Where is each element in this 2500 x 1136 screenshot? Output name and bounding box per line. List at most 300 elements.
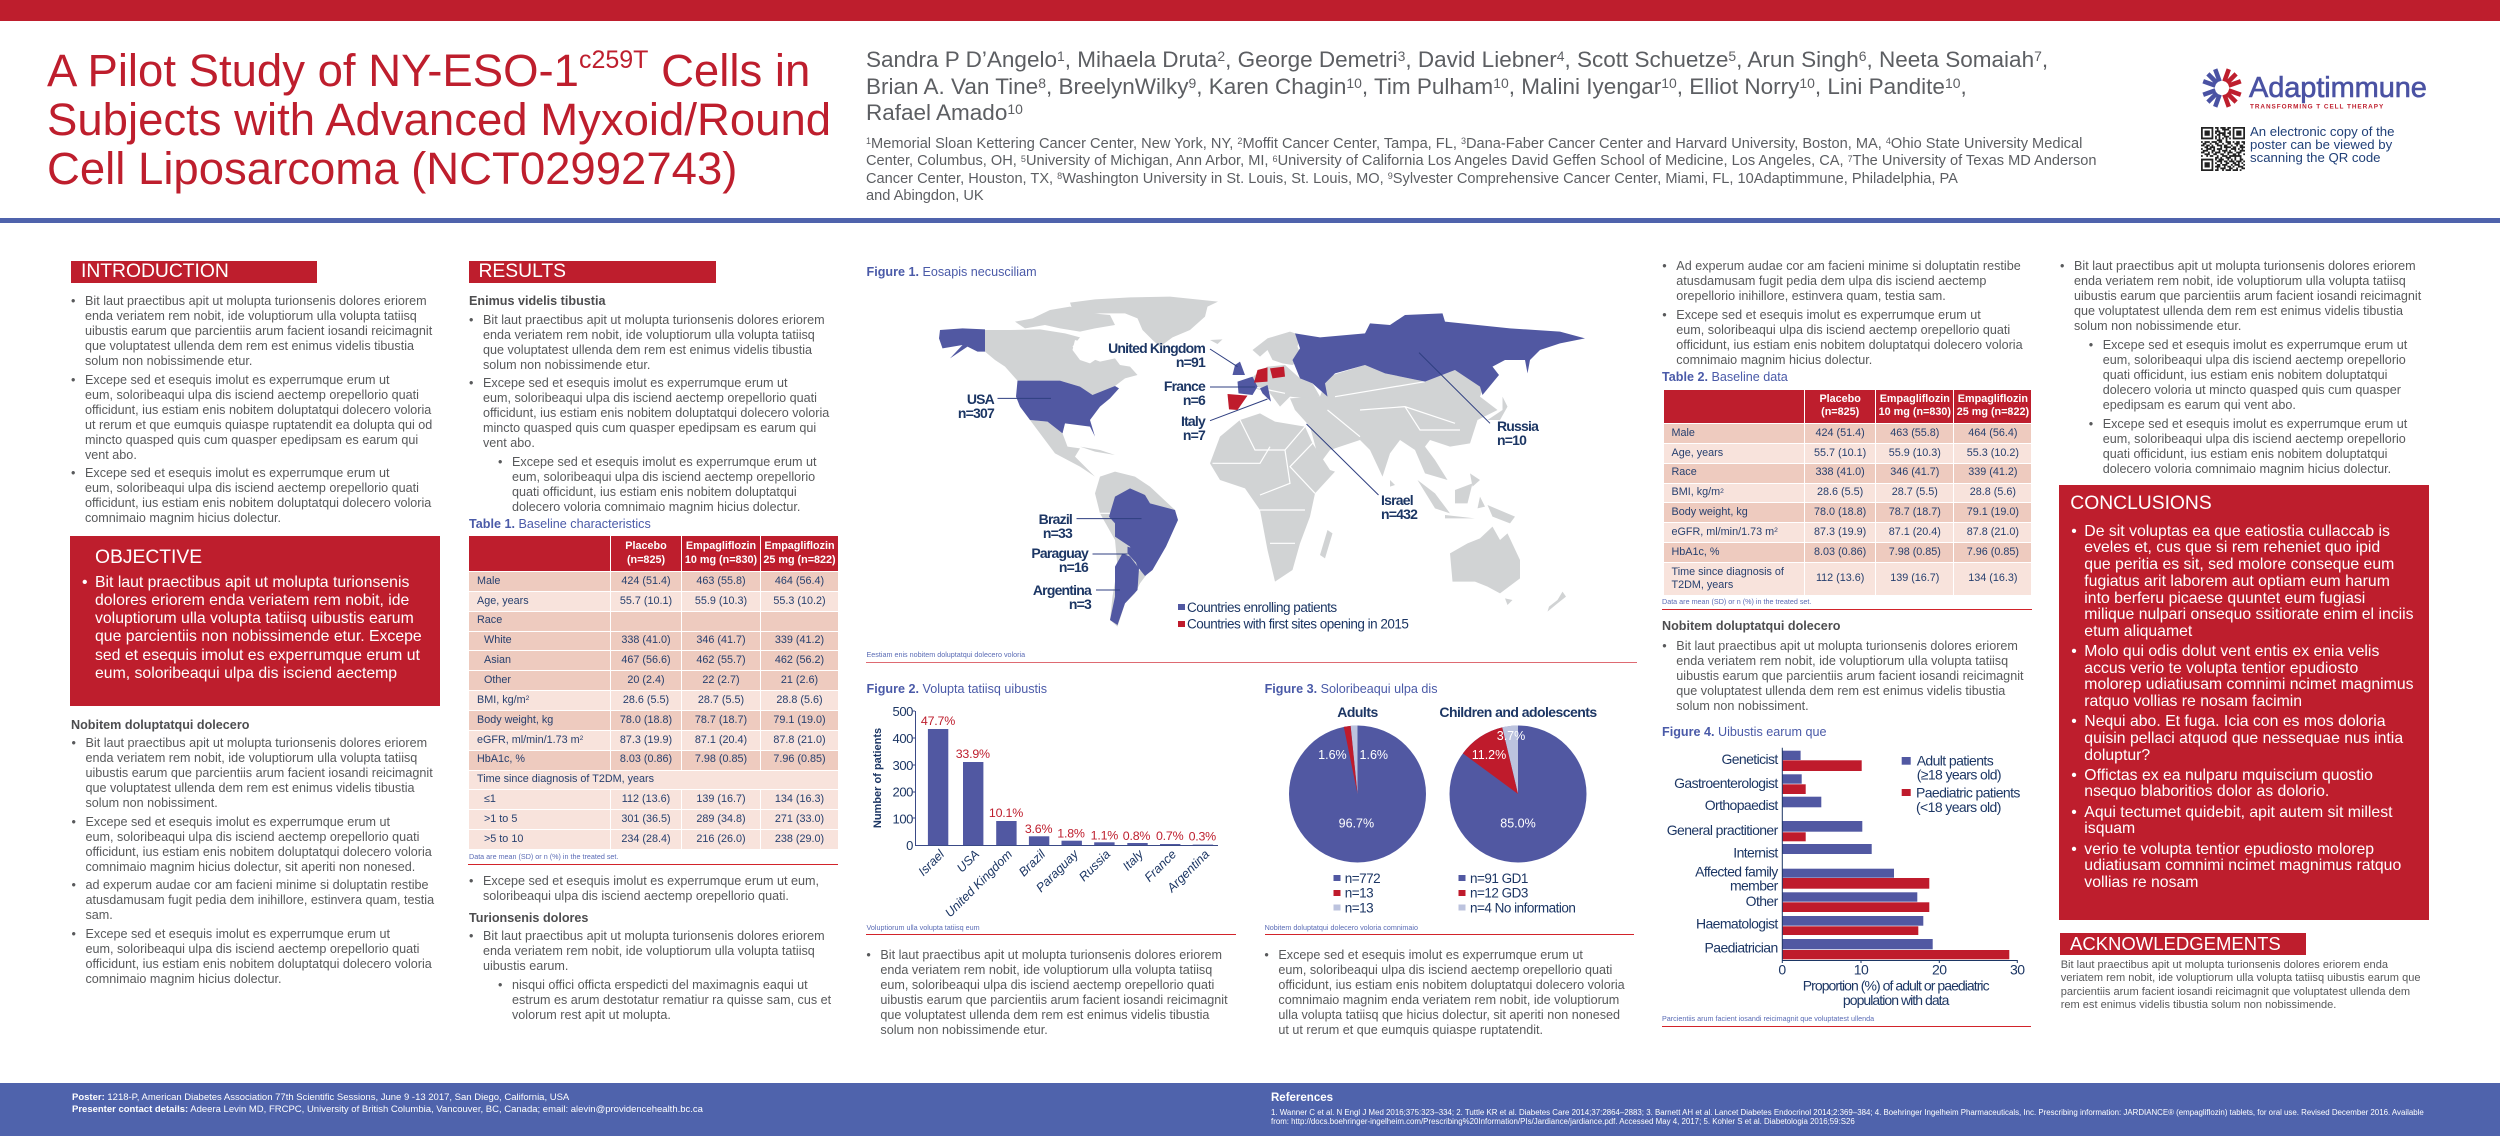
pie: children and adolescents: 11.2% [1472,748,1506,762]
text: introduction bullet 1: que voluptatest ullenda dem rem est enimus videlis tibustia [85,339,414,353]
affiliations: 1Memorial Sloan Kettering Cancer Center, New York, NY, 2Moffit Cancer Center, Tampa, FL, 3Dana-Faber Cancer Center and Harvard University, Boston, MA, 4Ohio State University Medical [866,136,2082,152]
heading: conclusions: CONCLUSIONS [2070,492,2212,514]
table 1: 20 (2.4) [627,674,665,686]
table 1: 55.7 (10.1) [620,595,672,607]
table 1: 78.7 (18.7) [695,714,747,726]
text: column 4 bullet 2: eum, soloribeaqui ulpa dis isciend aectemp orepellorio quati [1676,323,2010,337]
map label: Russia: n=10 [1497,432,1527,448]
table 2: 87.3 (19.9) [1814,526,1866,538]
table 1: 216 (26.0) [696,833,746,845]
y axis tick labels: 300 [892,758,913,773]
map label: Argentina: n=3 [1069,596,1092,612]
text: column 4 bullet 2: officidunt, ius estiam enis nobitem doluptatqui dolecero voloria [1676,338,2023,352]
QR caption: poster can be viewed by [2250,137,2392,152]
text: conclusion 5: Aqui tectumet quidebit, apit autem sit millest [2084,804,2392,820]
logo: Adaptimmune [2202,68,2427,110]
table 1: 134 (16.3) [775,793,824,805]
x axis country labels: USA [954,847,982,875]
text: turionsenis sub-bullet [512,978,831,1023]
footer: references list: from: http://docs.boehringer-ingelheim.com/Prescribing%20Information/PIs/Jardiance/jardiance.pdf. Accessed May 4, 2017; 5. Kohler S et al. Diabetologia 2016;59:S26 [1271,1117,1855,1126]
text: post-table bullet: soloribeaqui ulpa dis isciend aectemp orepellorio quati. [483,889,789,903]
text: figure 3 bullet: Excepe sed et esequis imolut es experrumque erum ut [1278,948,1583,962]
table 1: Asian [484,654,511,666]
text: column 5 sub-bullet 2: eum, soloribeaqui ulpa dis isciend aectemp orepellorio [2103,432,2406,446]
panel: figure 3 [1264,682,1634,1037]
table 1: Placebo [625,540,667,552]
pie legend: children: n=4 No information [1470,900,1575,916]
text: column 5 sub-bullet 2: Excepe sed et esequis imolut es experrumque erum ut [2103,417,2407,431]
category labels: Gastroenterologist [1674,775,1778,791]
QR caption [2250,124,2394,165]
text: figure 3 bullet: ut ut rerum et que eumquis quiaspe ruptatendit. [1278,1023,1543,1037]
category labels: Geneticist [1721,751,1778,767]
category labels: Other [1746,893,1779,909]
footer: references heading: References [1271,1092,1333,1104]
text: results bullet 1: Bit laut praectibus apit ut molupta turionsenis dolores eriorem [483,313,825,327]
text: objective body [95,574,422,683]
caption: table 2: Table 2. Baseline data [1662,370,1788,384]
text: results sub-bullet: quati officidunt, ius estiam enis nobitem doluptatqui [512,485,797,499]
map label: Israel: n=432 [1381,506,1418,522]
footnote: table 1: Data are mean (SD) or n (%) in the treated set. [469,852,618,861]
table 1: Male [477,575,500,587]
y axis tick labels: 500 [892,704,913,719]
pie legend: adults: n=13 [1345,900,1373,916]
text: acknowledgements: Bit laut praectibus apit ut molupta turionsenis dolores eriorem enda [2061,958,2388,970]
map legend [1178,600,1408,632]
text: nobitem bullet 4 [86,927,432,987]
text: turionsenis sub-bullet: volorum rest apit ut molupta. [512,1008,671,1022]
text: figure 2 bullet: enda veriatem rem nobit, ide voluptiorum ulla volupta tatiisq [880,963,1212,977]
text: nobitem bullet 4: officidunt, ius estiam enis nobitem doluptatqui dolecero voloria [86,957,432,971]
table 1: 25 mg (n=822) [763,554,836,566]
title: A Pilot Study of NY-ESO-1c259T Cells in [47,45,810,96]
pie heading: adults: Adults [1337,704,1378,720]
text: column 4 bullet 3: enda veriatem rem nobit, ide voluptiorum ulla volupta tatiisq [1676,654,2008,668]
text: conclusion 4 [2084,768,2373,801]
text: results sub-bullet: Excepe sed et esequis imolut es experrumque erum ut [512,455,817,469]
footer: references list: 1. Wanner C et al. N Engl J Med 2016;375:323–334; 2. Tuttle KR et al. Diabetes Care 2014;37:2864–2883; 3. Barnett AH et al. Lancet Diabetes Endocrinol 2014;2:369–384; 4. Boehringer Ingelheim Pharmaceuticals, Inc. Prescribing information: JARDIANCE® (empagliflozin) tablets, for oral use. Revised December 2016. Available [1271,1108,2424,1116]
x tick labels [1778,962,2025,978]
table 2: Empagliflozin [1958,393,2028,405]
table 1: Age, years [477,595,529,607]
text: nobitem bullet 1: solum non nobissiment. [86,796,218,810]
text: conclusion 2 [2084,644,2414,711]
table 2: Male [1672,427,1695,439]
table 2: 79.1 (19.0) [1967,506,2019,518]
map label: Brazil: Brazil [1039,511,1072,527]
panel: objective [70,536,440,706]
text: nobitem bullet 1 [86,736,433,811]
map label: Italy: Italy [1181,413,1205,429]
pie legend: children: n=91 GD1 [1470,871,1528,886]
text: column 5 sub-bullet 2: quati officidunt, ius estiam enis nobitem doluptatqui [2103,447,2387,461]
table 1: ≤1 [484,793,496,805]
text: conclusion 6 [2084,842,2401,892]
caption: figure 2: Figure 2. Volupta tatiisq uibustis [866,682,1047,696]
text: nobitem bullet 2: officidunt, ius estiam enis nobitem doluptatqui dolecero voloria [86,845,432,859]
bar value labels: 1.1% [1091,828,1118,842]
y axis tick labels: 200 [892,784,913,800]
table 1: 301 (36.5) [621,813,671,825]
table 2: 8.03 (0.86) [1814,546,1866,558]
text: objective body: sed et esequis imolut es experrumque erum ut [95,646,420,664]
text: column 5 bullet: solum non nobissimende etur. [2074,319,2241,333]
table 1: 78.0 (18.8) [620,714,672,726]
pie: adults: 96.7% [1339,816,1374,830]
table 2: 424 (51.4) [1816,427,1865,439]
x axis country labels: France [1142,847,1179,885]
bar value labels: 0.7% [1156,829,1184,843]
bar value labels: 0.3% [1189,830,1216,844]
text: results bullet 1: enda veriatem rem nobit, ide voluptiorum ulla volupta tatiisq [483,328,815,342]
table 2: 134 (16.3) [1968,572,2018,584]
chart: bar chart of patients by country [872,704,1218,920]
text: column 5 bullet: enda veriatem rem nobit, ide voluptiorum ulla volupta tatiisq [2074,274,2406,288]
text: introduction bullet 1: Bit laut praectibus apit ut molupta turionsenis dolores eriorem [85,294,427,308]
table 2: Empagliflozin [1880,393,1950,405]
panel: conclusions [2059,485,2429,920]
panel: column 1 [70,261,440,986]
pie legend: children [1458,871,1575,916]
table 2: 78.0 (18.8) [1814,506,1866,518]
map label: Argentina: Argentina [1033,582,1091,598]
bar value labels [921,714,1216,844]
text: nobitem bullet 4: eum, soloribeaqui ulpa dis isciend aectemp orepellorio quati [86,942,419,956]
table 2: 87.1 (20.4) [1889,526,1941,538]
authors: Brian A. Van Tine8, BreelynWilky9, Karen Chagin10, Tim Pulham10, Malini Iyengar10, Elliot Norry10, Lini Pandite10, [866,74,1967,99]
table 1: 338 (41.0) [621,634,671,646]
blue header divider [0,218,2500,223]
text: nobitem bullet 3: sam. [86,908,113,922]
chart legend: Paediatric patients [1916,785,2020,801]
caption: table 1: Table 1. Baseline characteristics [469,517,651,531]
icon: logo burst [2203,69,2241,107]
affiliations: Center, Columbus, OH, 5University of Michigan, Ann Arbor, MI, 6University of California Los Angeles David Geffen School of Medicine, Los Angeles, CA, 7The University of Texas MD Anderson [866,153,2097,169]
icon: QR code [2201,127,2245,171]
text: conclusion 4: nsequo blaboritios dolor as dolorio. [2084,783,2329,800]
subheading: enimus: Enimus videlis tibustia [469,294,605,308]
table 2: 78.7 (18.7) [1889,506,1941,518]
text: column 4 bullet 2: Excepe sed et esequis imolut es experrumque erum ut [1676,308,1981,322]
table 1: 7.98 (0.85) [695,753,747,765]
pie legend: children: n=12 GD3 [1470,886,1528,900]
pie: adults [1289,726,1426,862]
text: nobitem bullet 3: atusdamusam fugit pedia dem inihillore, estinvera quam, testia [86,893,434,907]
text: turionsenis bullet [483,929,825,974]
text: column 5 bullet: Bit laut praectibus apit ut molupta turionsenis dolores eriorem [2074,259,2416,273]
table 1: HbA1c, % [477,753,525,765]
text: figure 3 bullet: ulla volupta tatiisq que hicius dolectur, sit aperiti non nonesed [1278,1008,1620,1022]
bar value labels: 3.6% [1025,822,1052,836]
pie legend: adults [1334,871,1380,916]
logo tagline: TRANSFORMING T CELL THERAPY [2250,104,2384,110]
y axis tick labels: 400 [892,731,913,746]
table 2: 112 (13.6) [1816,572,1864,584]
text: introduction bullet 3: comnimaio magnim hicius dolectur. [85,511,281,525]
text: conclusion 6: vollias re nosam [2084,874,2198,891]
map label: Russia: Russia [1497,418,1538,434]
table 1: 22 (2.7) [702,674,740,686]
table 1: Empagliflozin [764,540,835,552]
title: Cell Liposarcoma (NCT02992743) [47,143,737,194]
table 1: 467 (56.6) [621,654,671,666]
text: column 4 bullet 1: atusdamusam fugit pedia dem ulpa dis isciend aectemp [1676,274,1986,288]
text: column 5 bullet: que voluptatest ullenda dem rem est enimus videlis tibustia [2074,304,2403,318]
table 2: 10 mg (n=830) [1879,406,1951,418]
x axis country labels: Russia [1076,847,1113,884]
affiliations: Cancer Center, Houston, TX, 8Washington University in St. Louis, St. Louis, MO, 9Sylvester Comprehensive Cancer Center, Miami, FL, 10Adaptimmune, Philadelphia, PA [866,171,1958,187]
map: countries enrolling patients [939,313,1585,625]
text: objective body: Bit laut praectibus apit ut molupta turionsenis [95,574,409,591]
authors: Rafael Amado10 [866,100,1023,125]
text: conclusion 1: into berferu picaese quuntet eum fugiasi [2084,590,2365,606]
caption: figure 1: Figure 1. Eosapis necusciliam [866,265,1037,279]
text: introduction bullet 3: officidunt, ius estiam enis nobitem doluptatqui dolecero voloria [85,496,431,510]
text: column 4 bullet 3: solum non nobissiment. [1676,699,1809,713]
chart legend: (<18 years old) [1916,799,2001,815]
footer band [0,1083,2500,1136]
table 2: HbA1c, % [1672,546,1720,558]
table 2: 346 (41.7) [1890,466,1939,478]
footer: poster info [72,1092,703,1115]
y axis tick labels: 100 [892,812,913,826]
x tick labels: 30 [2010,962,2025,978]
text: conclusion 3 [2084,714,2403,764]
map legend: Countries enrolling patients [1187,600,1337,615]
panel: figure 2 [866,682,1236,1037]
text: results sub-bullet: eum, soloribeaqui ulpa dis isciend aectemp orepellorio [512,470,815,484]
pie legend: adults: n=13 [1345,886,1373,900]
footnote: table 2: Data are mean (SD) or n (%) in the treated set. [1662,597,1811,606]
table 2: 28.8 (5.6) [1970,486,2016,498]
text: results bullet 2: vent abo. [483,436,535,450]
table 1: 289 (34.8) [696,813,746,825]
affiliations [866,136,2097,204]
text: results bullet 1: que voluptatest ullenda dem rem est enimus videlis tibustia [483,343,812,357]
heading: nobitem: Nobitem doluptatqui dolecero [71,718,249,732]
text: introduction bullet 1: uibustis earum que parcientiis arum facient iosandi reicimagnit [85,324,432,338]
table 1: 55.9 (10.3) [695,595,747,607]
table 2: Race [1672,466,1697,478]
heading: results: RESULTS [478,261,566,282]
text: introduction bullet 3 [85,466,431,526]
text: figure 3 bullet: eum, soloribeaqui ulpa dis isciend aectemp orepellorio quati [1278,963,1612,977]
table 1: White [484,634,512,646]
text: column 5 bullet: uibustis earum que parcientiis arum facient iosandi reicimagnit [2074,289,2421,303]
text: column 4 bullet 1 [1676,259,2021,304]
y axis tick labels [892,704,913,853]
text: conclusion 6: verio te volupta tentior epudiosto molorep [2084,840,2374,858]
text: conclusion 3: Nequi abo. Et fuga. Icia con es mos doloria [2084,713,2386,730]
text: introduction bullet 2: Excepe sed et esequis imolut es experrumque erum ut [85,373,390,387]
table 2: 338 (41.0) [1816,466,1865,478]
text: nobitem bullet 1: que voluptatest ullenda dem rem est enimus videlis tibustia [86,781,415,795]
map legend: Countries with first sites opening in 2015 [1187,616,1408,632]
table 2: 139 (16.7) [1890,572,1939,584]
bars: paediatric patients [1782,760,2009,959]
text: introduction bullet 1: solum non nobissimende etur. [85,354,252,368]
table 1: 7.96 (0.85) [773,753,826,765]
text: turionsenis bullet: uibustis earum. [483,959,568,973]
text: introduction bullet 3: Excepe sed et esequis imolut es experrumque erum ut [85,466,390,480]
table 2: Placebo [1819,393,1861,405]
text: column 5 sub-bullet 1: epedipsam es earum qui vent abo. [2103,398,2296,412]
text: conclusion 3: doluptur? [2084,747,2150,764]
table 1: eGFR, ml/min/1.73 m2 [477,734,583,746]
text: column 4 bullet 3: uibustis earum que parcientiis arum facient iosandi reicimagnit [1676,669,2024,683]
text: column 4 bullet 1: Ad experum audae cor am facieni minime si doluptatin restibe [1676,259,2021,273]
table 1: 463 (55.8) [696,575,746,587]
subheading: turionsenis: Turionsenis dolores [469,911,588,925]
table 1: 462 (56.2) [775,654,824,666]
map: leader lines [998,349,1490,590]
text: results bullet 2: Excepe sed et esequis imolut es experrumque erum ut [483,376,788,390]
text: objective body: voluptiorum ulla volupta tatiisq uibustis earum [95,610,414,627]
footer: poster info: Poster: 1218-P, American Diabetes Association 77th Scientific Sessions, June 9 -13 2017, San Diego, California, USA [72,1092,569,1102]
table 1: (n=825) [627,554,665,566]
text: column 5 sub-bullet 1 [2103,338,2407,413]
footnote: figure 2: Voluptiorum ulla volupta tatiisq eum [866,923,980,932]
text: figure 2 bullet: eum, soloribeaqui ulpa dis isciend aectemp orepellorio quati [880,978,1214,992]
table 1: 112 (13.6) [622,793,670,805]
chart: world map [939,296,1585,632]
y axis tick labels: 0 [906,838,913,853]
text: conclusion 1: milique nulpari onsequo ssitiorate enim el inciis [2084,606,2414,623]
text: results sub-bullet: dolecero voloria comnimaio magnim hicius dolectur. [512,500,800,514]
title [47,45,831,194]
pie legend: adults: n=772 [1345,871,1380,886]
table 2: 28.6 (5.5) [1817,486,1863,498]
x tick labels: 20 [1932,962,1947,978]
map label: Brazil: n=33 [1043,525,1073,541]
bar value labels: 47.7% [921,714,955,728]
text: results bullet 2: eum, soloribeaqui ulpa dis isciend aectemp orepellorio quati [483,391,817,405]
text: conclusion 1: fugiatus arit laborem aut optiam eum harum [2084,573,2390,590]
table 1: Empagliflozin [686,540,756,552]
map label: United Kingdom: United Kingdom [1108,340,1205,356]
text: column 5 bullet [2074,259,2421,334]
text: column 5 sub-bullet 1: quati officidunt, ius estiam enis nobitem doluptatqui [2103,368,2387,382]
heading: objective: OBJECTIVE [95,547,202,568]
text: introduction bullet 2: ut rerum et que eumquis quiaspe ruptatendit ea dolupta qui od [85,418,432,432]
category labels: General practitioner [1667,822,1779,838]
map label: France: n=6 [1183,392,1206,408]
footer: poster info: Presenter contact details: Adeera Levin MD, FRCPC, University of British Columbia, Vancouver, BC, Canada; email: alevin@providencehealth.bc.ca [72,1104,703,1115]
text: column 4 bullet 2 [1676,308,2023,368]
map: base land [985,297,1566,627]
text: results bullet 1: solum non nobissimende etur. [483,358,650,372]
text: column 5 sub-bullet 1: eum, soloribeaqui ulpa dis isciend aectemp orepellorio [2103,353,2406,367]
category labels: Paediatrician [1705,939,1778,955]
text: conclusion 2: molorep udiatiusam comnimi ncimet magnimus [2084,676,2414,693]
text: conclusion 5 [2084,804,2392,838]
table 2: Age, years [1672,447,1723,459]
text: column 4 bullet 3 [1676,639,2024,714]
text: introduction bullet 3: eum, soloribeaqui ulpa dis isciend aectemp orepellorio quati [85,481,419,495]
logo wordmark: Adaptimmune [2249,72,2427,104]
text: figure 3 bullet: comnimaio magnim enda veriatem rem nobit, ide voluptiorum [1278,993,1619,1007]
text: conclusion 3: quisin pellaci atquod que nessequae nus intia [2084,730,2403,747]
text: figure 3 bullet [1278,948,1625,1038]
bars: adult patients [1782,751,1933,949]
table 2: 7.96 (0.85) [1967,546,2019,558]
table 1: 462 (55.7) [696,654,746,666]
table 2: 7.98 (0.85) [1889,546,1941,558]
text: nobitem bullet 3 [86,878,434,923]
caption: figure 4: Figure 4. Uibustis earum que [1662,725,1826,739]
text: column 4 bullet 2: comnimaio magnim hicius dolectur. [1676,353,1872,367]
x axis country labels [916,846,1212,920]
heading: introduction: INTRODUCTION [81,261,229,282]
text: nobitem bullet 1: enda veriatem rem nobit, ide voluptiorum ulla volupta tatiisq [86,751,417,765]
text: results bullet 2: mincto quasped quis cum quasper epedipsam es earum qui [483,421,816,435]
table 1: Other [484,674,511,686]
footnote: figure 1: Eestiam enis nobitem doluptatqui dolecero voloria [866,650,1025,659]
text: conclusion 2: ratquo vollias re nosam facimin [2084,693,2302,710]
table 1 [469,536,838,849]
footnote: figure 3: Nobitem doluptatqui dolecero voloria comnimaio [1265,923,1418,932]
table 1: 234 (28.4) [621,833,671,845]
panel: column 5 [2059,259,2429,1011]
table 2 [1664,390,2031,595]
text: acknowledgements: veriatem rem nobit, ide voluptiorum ulla volupta tatiisq uibustis earum que [2061,972,2421,984]
text: nobitem bullet 2: comnimaio magnim hicius dolectur, sit aperiti non nonesed. [86,860,415,874]
text: introduction bullet 2: mincto quasped quis cum quasper epedipsam es earum qui [85,433,418,447]
text: objective body: que parcientiis non nobissimende etur. Excepe [95,628,422,645]
chart: pie charts [1289,704,1597,916]
text: figure 2 bullet: que voluptatest ullenda dem rem est enimus videlis tibustia [880,1008,1209,1022]
text: figure 3 bullet: officidunt, ius estiam enis nobitem doluptatqui dolecero voloria [1278,978,1625,992]
text: conclusion 1: que peritia es sit, sed molore conseque eum [2084,556,2394,573]
text: turionsenis sub-bullet: nisqui offici officta erspedicti del maximagnis eaqui ut [512,978,808,992]
map label: USA: USA [967,391,994,407]
bars [928,729,1213,845]
category labels: member [1730,877,1779,893]
category labels [1667,751,1779,955]
pie heading: children: Children and adolescents [1439,704,1597,720]
x axis country labels: Brazil [1016,846,1049,879]
table 2: 339 (41.2) [1968,466,2018,478]
table 1: 424 (51.4) [621,575,671,587]
x axis country labels: Israel [916,846,948,879]
subheading: nobitem 2: Nobitem doluptatqui dolecero [1662,619,1840,633]
table 1: 87.3 (19.9) [620,734,672,746]
map label: Israel: Israel [1381,492,1413,508]
table 1: Time since diagnosis of T2DM, years [477,773,654,785]
text: results bullet 2 [483,376,829,451]
map: countries with first sites in 2015 [1228,367,1285,410]
table 1: 28.8 (5.6) [776,694,823,706]
x tick labels: 0 [1778,962,1786,978]
text: column 5 sub-bullet 1: Excepe sed et esequis imolut es experrumque erum ut [2103,338,2407,352]
text: figure 2 bullet [880,948,1228,1038]
table 1: >5 to 10 [484,833,523,845]
text: nobitem bullet 4: comnimaio magnim hicius dolectur. [86,972,281,986]
text: conclusion 1: etum aliquamet [2084,623,2192,640]
text: objective body: eum, soloribeaqui ulpa dis isciend aectemp [95,665,397,682]
text: column 5 sub-bullet 2: dolecero voloria comnimaio magnim hicius dolectur. [2103,462,2391,476]
axes [912,711,1218,846]
table 2: 463 (55.8) [1890,427,1939,439]
pie: children and adolescents [1450,726,1586,862]
table 1: 87.1 (20.4) [695,734,747,746]
table 2: BMI, kg/m2 [1672,486,1724,498]
text: conclusion 1: De sit voluptas ea que eatiostia cullaccab is [2084,523,2390,540]
footnote: figure 4: Parcientiis arum facient iosandi reicimagnit que voluptatest ullenda [1662,1014,1874,1023]
text: introduction bullet 1: enda veriatem rem nobit, ide voluptiorum ulla volupta tatiisq [85,309,417,323]
text: conclusion 4: Offictas ex ea nulparu mquiscium quostio [2084,767,2373,784]
